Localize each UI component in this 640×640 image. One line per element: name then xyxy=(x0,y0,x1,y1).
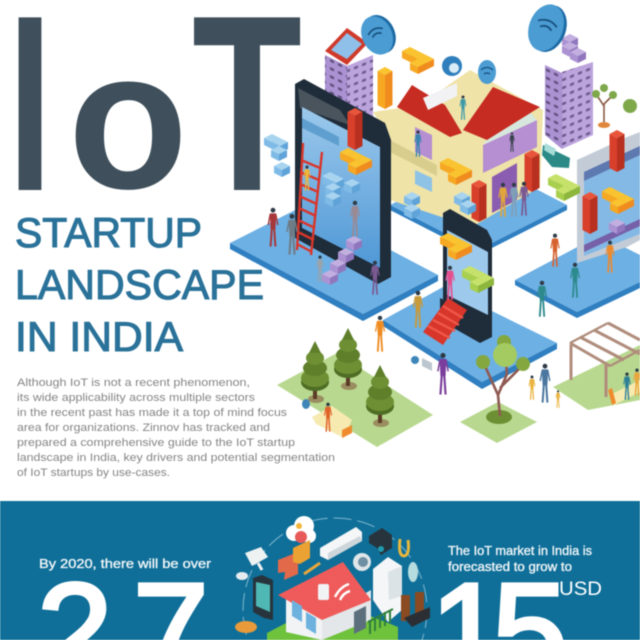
intro paragraph: landscape in India, key drivers and potential segmentation xyxy=(17,452,335,464)
wifi disc: right xyxy=(522,0,573,57)
heading: startup landscape in india xyxy=(15,209,264,360)
icon: cloud xyxy=(286,516,316,543)
red tetris columns xyxy=(348,108,624,234)
stat text: market forecast: forecasted to grow to xyxy=(448,559,572,574)
tower: left xyxy=(325,55,373,130)
red stairs xyxy=(423,298,467,345)
icon: key xyxy=(304,563,320,574)
window unit on tablet xyxy=(302,118,339,146)
platform: house xyxy=(390,160,567,255)
lawn: trees xyxy=(277,353,433,447)
icon: magnet xyxy=(400,539,408,556)
panel: market forecast band xyxy=(0,501,640,640)
wifi tag near bench xyxy=(302,399,310,409)
intro paragraph: of IoT startups by use-cases. xyxy=(17,467,170,479)
room: upper right xyxy=(483,120,537,173)
green tetris blocks xyxy=(462,174,580,293)
bench: right xyxy=(608,380,640,405)
intro paragraph: area for organizations. Zinnov has tracked and xyxy=(17,422,270,434)
icon: tag xyxy=(235,621,257,633)
laptop near phone platform xyxy=(411,356,432,371)
cutaway highlight xyxy=(423,83,457,110)
stat text: market forecast: The IoT market in India is xyxy=(448,543,592,558)
small trees xyxy=(592,84,637,128)
fence xyxy=(368,609,393,634)
lawn: pergola xyxy=(553,345,640,410)
intro paragraph xyxy=(17,377,335,479)
tower: right xyxy=(545,34,593,149)
blue tetris in tablet xyxy=(322,172,360,207)
balcony ledge xyxy=(390,140,437,176)
icon: air conditioner xyxy=(320,527,362,560)
teal car xyxy=(542,143,570,168)
pillar: left xyxy=(472,180,486,222)
intro paragraph: prepared a comprehensive guide to the IoT startup xyxy=(17,437,295,449)
pine trees xyxy=(301,328,394,427)
house walls xyxy=(286,597,322,640)
wifi disc: small left xyxy=(442,56,462,76)
device orbit ring xyxy=(243,518,427,640)
wifi disc: left xyxy=(355,10,402,60)
roof device xyxy=(318,584,329,600)
icon: chat bubbles xyxy=(278,540,310,580)
stat text: market forecast xyxy=(448,543,592,574)
tablet: left xyxy=(295,79,391,284)
purple block xyxy=(609,219,625,234)
unit: USD: USD xyxy=(559,579,602,600)
orange column xyxy=(378,67,392,109)
intro paragraph: Although IoT is not a recent phenomenon, xyxy=(17,377,250,389)
icon: small chip xyxy=(236,572,248,580)
icon: security camera xyxy=(245,547,268,570)
pillar: right xyxy=(524,150,540,192)
icon: smartwatch xyxy=(353,553,371,571)
house walls xyxy=(373,70,543,227)
house roof xyxy=(278,562,371,620)
bench: left xyxy=(312,406,352,438)
icon: light bulb xyxy=(408,562,418,582)
tower roof with solar panel xyxy=(325,28,368,65)
orange tetris blocks xyxy=(340,47,634,260)
intro paragraph: in the recent past has made it a top of mind focus xyxy=(17,407,287,419)
wifi disc: small right xyxy=(478,60,496,84)
house side wall xyxy=(322,590,371,640)
lawn: small tree xyxy=(460,402,537,443)
house windows xyxy=(292,600,316,634)
heading: startup landscape in india: LANDSCAPE xyxy=(15,261,264,308)
door xyxy=(492,163,517,213)
stat number: 15 xyxy=(430,555,568,640)
room: left xyxy=(415,127,432,160)
lawn base xyxy=(267,600,398,640)
icon: smartphone xyxy=(253,575,273,620)
house xyxy=(373,70,543,227)
heading: startup landscape in india: STARTUP xyxy=(15,209,202,256)
isometric city illustration xyxy=(230,0,640,447)
window xyxy=(415,170,432,192)
pergola xyxy=(570,323,640,397)
icon: fridge xyxy=(373,557,402,622)
icon: coffee machine xyxy=(369,528,392,555)
red ladder xyxy=(297,143,322,255)
tablet: right xyxy=(577,132,640,263)
purple stairs xyxy=(322,236,362,285)
platform: phone xyxy=(383,287,557,389)
deciduous tree xyxy=(476,335,530,424)
stat text: devices: By 2020, there will be over xyxy=(39,556,212,571)
smart home illustration xyxy=(235,516,430,640)
stat number: 27 xyxy=(37,555,209,640)
phone: centre xyxy=(440,209,492,343)
platform: right tablet xyxy=(515,235,640,318)
blue tetris blocks xyxy=(264,134,476,219)
house door xyxy=(354,606,366,634)
heading: startup landscape in india: IN INDIA xyxy=(15,313,183,360)
people xyxy=(268,96,640,432)
intro paragraph: its wide applicability across multiple sectors xyxy=(17,392,255,404)
icon: speakers xyxy=(401,592,430,627)
wifi on roof xyxy=(335,584,350,600)
title: IoT xyxy=(8,0,302,244)
platform: left tablet xyxy=(230,205,438,321)
room window xyxy=(483,112,537,145)
title: IoT: o xyxy=(68,9,188,230)
roof: left xyxy=(397,85,462,137)
roof: right xyxy=(463,87,540,140)
